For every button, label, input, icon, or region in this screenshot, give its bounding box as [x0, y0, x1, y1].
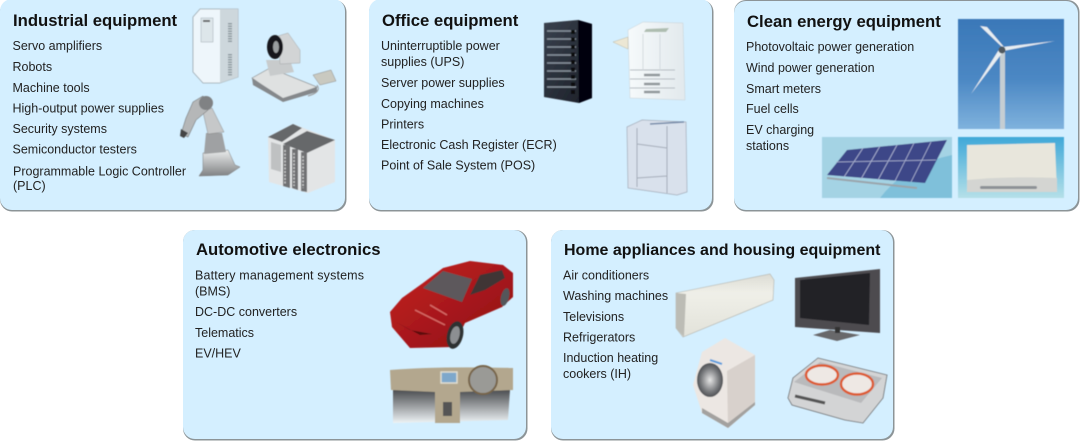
- list: industrial equipment: Servo amplifiers: [12, 39, 102, 53]
- list: home appliances and housing equipment: [563, 268, 668, 381]
- heading: clean energy equipment: Clean energy equipment: [747, 12, 941, 31]
- icon: air conditioner: [676, 274, 774, 337]
- icon: copier: [613, 22, 685, 100]
- list: industrial equipment: Machine tools: [12, 81, 90, 95]
- icon: server rack: [544, 20, 592, 103]
- heading: office equipment: Office equipment: [382, 11, 519, 30]
- heading: automotive electronics: Automotive electronics: [196, 240, 381, 259]
- icon: wind turbine: [958, 19, 1064, 129]
- icon: induction cooker: [788, 358, 887, 423]
- list: industrial equipment: Robots: [12, 60, 52, 74]
- list: clean energy equipment: EV charging: [746, 123, 814, 137]
- panel: clean energy equipment: [734, 0, 1080, 212]
- list: office equipment: Server power supplies: [381, 76, 505, 90]
- icon: solar panel: [822, 137, 952, 198]
- list: home appliances and housing equipment: Induction heating: [563, 351, 658, 365]
- list: automotive electronics: [195, 268, 364, 360]
- panel: office equipment: [369, 0, 714, 212]
- icon: robot arm: [180, 96, 240, 176]
- list: office equipment: Copying machines: [381, 97, 484, 111]
- list: industrial equipment: High-output power supplies: [12, 102, 164, 116]
- icon: red car: [390, 261, 513, 351]
- list: industrial equipment: (PLC): [13, 179, 46, 193]
- list: office equipment: Electronic Cash Register (ECR): [381, 138, 557, 152]
- list: clean energy equipment: [746, 40, 914, 153]
- list: automotive electronics: EV/HEV: [195, 346, 242, 360]
- list: clean energy equipment: Fuel cells: [746, 102, 799, 116]
- list: industrial equipment: [12, 39, 186, 193]
- list: automotive electronics: Battery management systems: [195, 268, 364, 282]
- list: home appliances and housing equipment: Air conditioners: [563, 268, 649, 282]
- list: office equipment: Printers: [381, 118, 424, 132]
- list: automotive electronics: (BMS): [195, 284, 230, 298]
- list: clean energy equipment: Photovoltaic power generation: [746, 40, 914, 54]
- panel: home appliances and housing equipment: [551, 230, 894, 440]
- list: industrial equipment: Security systems: [12, 122, 107, 136]
- list: automotive electronics: DC-DC converters: [195, 305, 297, 319]
- icon: car dashboard: [390, 366, 513, 423]
- list: home appliances and housing equipment: cookers (IH): [563, 367, 631, 381]
- list: office equipment: Point of Sale System (POS): [381, 158, 535, 172]
- list: industrial equipment: Programmable Logic Controller: [13, 164, 186, 178]
- list: automotive electronics: Telematics: [195, 326, 254, 340]
- icon: PLC modules: [268, 124, 335, 193]
- list: clean energy equipment: stations: [746, 139, 789, 153]
- icon: charging station: [958, 137, 1064, 198]
- icon: servo amplifier: [193, 9, 238, 83]
- list: home appliances and housing equipment: Refrigerators: [563, 330, 635, 344]
- list: home appliances and housing equipment: Washing machines: [563, 289, 668, 303]
- list: home appliances and housing equipment: Televisions: [563, 310, 624, 324]
- icon: washing machine: [693, 338, 755, 428]
- list: office equipment: supplies (UPS): [381, 55, 464, 69]
- list: clean energy equipment: Smart meters: [746, 82, 821, 96]
- list: office equipment: Uninterruptible power: [381, 39, 500, 53]
- list: office equipment: [381, 39, 557, 172]
- panel: industrial equipment: [0, 0, 346, 212]
- heading: industrial equipment: Industrial equipment: [13, 11, 178, 30]
- icon: television: [795, 269, 880, 341]
- icon: semiconductor tester machine: [252, 33, 336, 102]
- icon: printer cabinet: [627, 120, 687, 195]
- heading: home appliances and housing equipment: Home appliances and housing equipment: [564, 242, 881, 259]
- panel: automotive electronics: [183, 230, 528, 440]
- list: clean energy equipment: Wind power generation: [746, 61, 875, 75]
- list: industrial equipment: Semiconductor testers: [12, 142, 137, 156]
